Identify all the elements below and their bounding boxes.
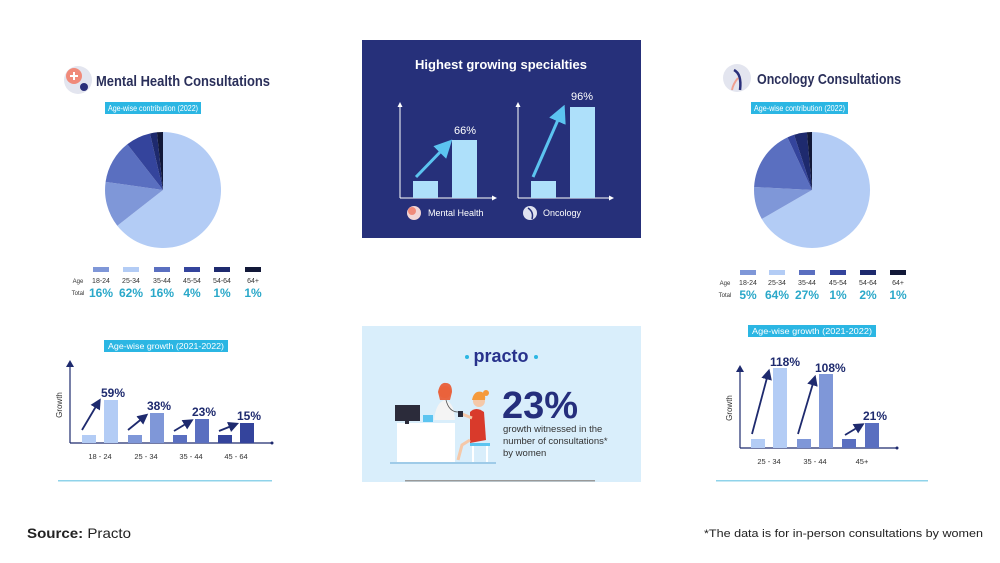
- bar chart: mental health growth 66%: 66%: [454, 125, 476, 137]
- label: oncology: Oncology: [543, 208, 582, 218]
- legend: oncology: 5%: [739, 288, 757, 302]
- bar chart: oncology growth: 108%: [815, 361, 846, 375]
- bar chart: oncology growth: 21%: [863, 409, 887, 423]
- panel: oncology growth: [716, 325, 928, 482]
- bar chart: oncology growth 96%: [516, 91, 614, 200]
- legend: mental health: 4%: [183, 286, 201, 300]
- legend: oncology: 64+: [892, 280, 904, 287]
- legend: mental health: Age: [73, 279, 84, 285]
- legend: mental health: 35-44: [153, 278, 171, 285]
- icon: mental health: [64, 66, 92, 94]
- bar chart: mental health growth: 45 - 64: [224, 452, 248, 461]
- legend: oncology: 64%: [765, 288, 789, 302]
- legend: oncology: 1%: [889, 288, 907, 302]
- bar chart: oncology growth: 25 - 34: [757, 457, 781, 466]
- legend: oncology: Total: [719, 293, 731, 299]
- legend: mental health: 1%: [213, 286, 231, 300]
- legend: mental health: [72, 267, 262, 300]
- legend: mental health: 64+: [247, 278, 259, 285]
- legend: mental health: 18-24: [92, 278, 110, 285]
- pie chart: oncology: [754, 132, 870, 248]
- bar chart: mental health growth: 38%: [147, 399, 171, 413]
- illustration: doctor and patient: [390, 383, 496, 464]
- bar chart: mental health growth: [55, 360, 274, 461]
- text: growth description: number of consultations*: [503, 436, 608, 447]
- text: growth description: [503, 424, 608, 459]
- legend: oncology: 54-64: [859, 280, 877, 287]
- bar chart: oncology growth: Growth: [725, 395, 734, 421]
- bar chart: oncology growth 96%: 96%: [571, 91, 593, 103]
- label: mental health: Mental Health: [428, 208, 484, 218]
- bar chart: mental health growth: 59%: [101, 386, 125, 400]
- legend: mental health: Total: [72, 291, 84, 297]
- panel: mental health contribution: [64, 66, 270, 300]
- bar chart: mental health growth 66%: [398, 102, 497, 200]
- legend: oncology: 27%: [795, 288, 819, 302]
- label: mental health: [407, 206, 484, 220]
- heading: Oncology Consultations: Oncology Consultations: [757, 71, 901, 88]
- text: growth description: growth witnessed in the: [503, 424, 602, 435]
- legend: mental health: 25-34: [122, 278, 140, 285]
- bar chart: mental health growth: 15%: [237, 409, 261, 423]
- legend: oncology: 2%: [859, 288, 877, 302]
- heading: Mental Health Consultations: Mental Health Consultations: [96, 73, 270, 90]
- legend: oncology: 25-34: [768, 280, 786, 287]
- bar chart: mental health growth: Growth: [55, 392, 64, 418]
- legend: oncology: 18-24: [739, 280, 757, 287]
- legend: oncology: [719, 270, 907, 302]
- heading: highest growing specialties: Highest growing specialties: [415, 57, 587, 72]
- bar chart: mental health growth: 25 - 34: [134, 452, 158, 461]
- panel: practo women consultations: [362, 326, 641, 482]
- tag: age-wise contribution: Age-wise contribution (2022): [754, 103, 845, 113]
- bar chart: mental health growth: 23%: [192, 405, 216, 419]
- legend: mental health: 16%: [150, 286, 174, 300]
- legend: mental health: 62%: [119, 286, 143, 300]
- legend: oncology: 1%: [829, 288, 847, 302]
- logo: practo: practo: [473, 346, 529, 366]
- bar chart: oncology growth: 45+: [856, 457, 869, 466]
- tag: age-wise contribution: Age-wise contribution (2022): [108, 103, 198, 113]
- stat: 23%: 23%: [502, 385, 578, 427]
- text: growth description: by women: [503, 448, 546, 459]
- legend: mental health: 1%: [244, 286, 262, 300]
- tag: age-wise growth: Age-wise growth (2021-2022): [108, 341, 224, 351]
- legend: mental health: 54-64: [213, 278, 231, 285]
- panel: mental health growth: [55, 340, 274, 482]
- legend: oncology: Age: [720, 281, 731, 287]
- bar chart: oncology growth: 118%: [770, 355, 800, 369]
- bar chart: mental health growth: 18 - 24: [88, 452, 112, 461]
- legend: mental health: 16%: [89, 286, 113, 300]
- source: Source: Practo: [27, 525, 131, 541]
- panel: highest growing specialties: [362, 40, 641, 238]
- bar chart: oncology growth: 35 - 44: [803, 457, 827, 466]
- bar chart: mental health growth: 35 - 44: [179, 452, 203, 461]
- legend: oncology: 45-54: [829, 280, 847, 287]
- bar chart: oncology growth: [725, 355, 898, 466]
- tag: age-wise growth: Age-wise growth (2021-2022): [752, 326, 872, 336]
- label: oncology: [523, 206, 582, 220]
- panel: oncology contribution: [719, 64, 907, 302]
- legend: mental health: 45-54: [183, 278, 201, 285]
- pie chart: mental health: [105, 132, 221, 248]
- footnote: *The data is for in-person consultations by women: [704, 528, 983, 540]
- icon: oncology ribbon: [723, 64, 751, 92]
- legend: oncology: 35-44: [798, 280, 816, 287]
